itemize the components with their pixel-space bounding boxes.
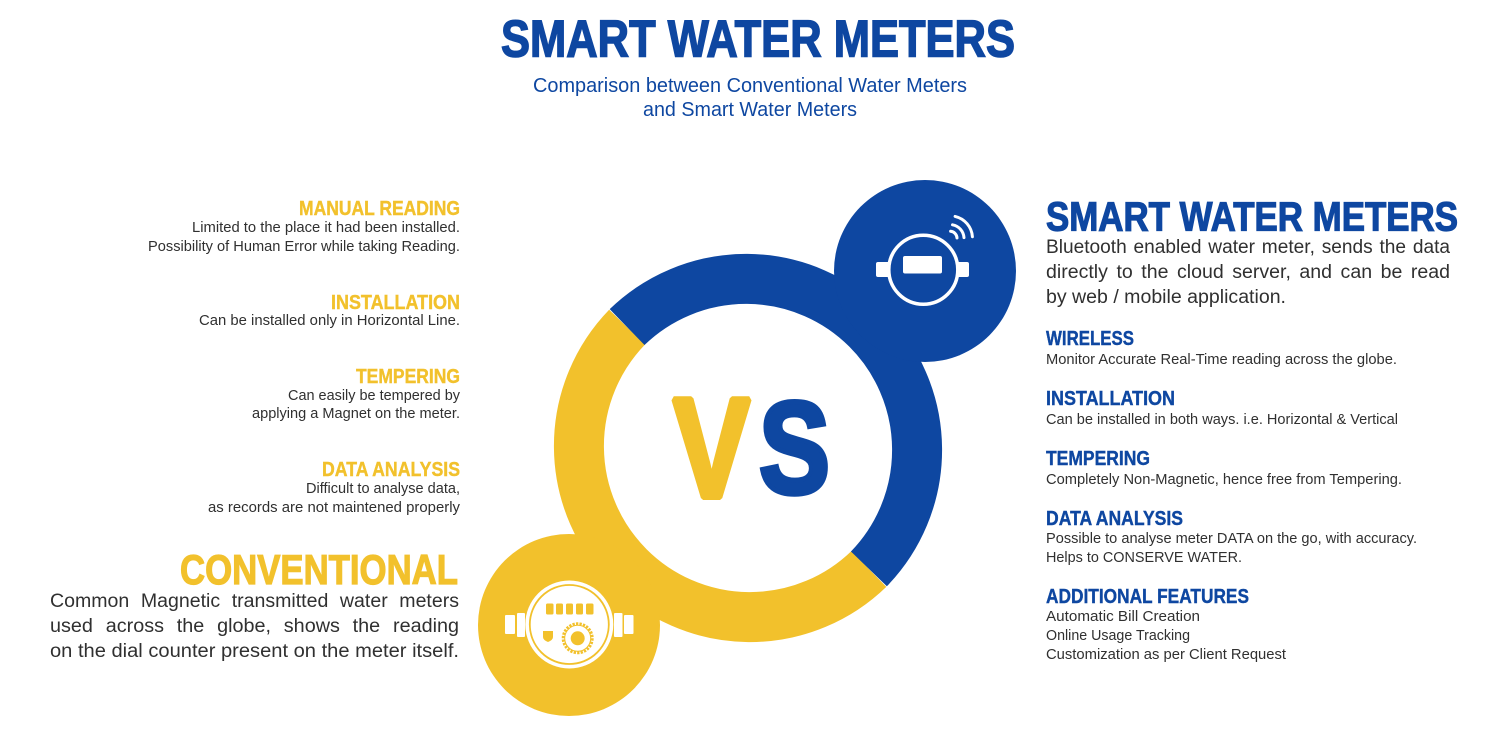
icon: smart water meter with signal [876,216,972,304]
tempering item: Completely Non-Magnetic, hence free from Tempering. [1046,472,1402,488]
data analysis item: Possible to analyse meter DATA on the go, with accuracy. [1046,531,1417,547]
additional features item [1046,585,1286,663]
tempering item [252,366,461,422]
data analysis item [1046,507,1417,566]
wireless item [1046,327,1397,368]
panel: conventional summary: Common Magnetic transmitted water meters [50,591,459,612]
manual reading item [148,198,460,255]
panel: smart meter summary [1046,194,1458,308]
yellow circle [478,534,660,716]
data analysis item: DATA ANALYSIS [322,459,460,481]
panel: conventional summary [50,546,459,662]
panel: conventional summary: CONVENTIONAL [180,546,458,593]
panel: smart meter features [1046,327,1417,663]
data analysis item: DATA ANALYSIS [1046,507,1183,530]
additional features item: Automatic Bill Creation [1046,609,1200,625]
panel: smart meter summary: by web / mobile application. [1046,287,1286,308]
VS letters: V [673,369,750,528]
installation item [1046,387,1398,428]
VS letters [673,369,830,528]
tempering item: applying a Magnet on the meter. [252,406,460,422]
tempering item [1046,447,1402,488]
manual reading item: MANUAL READING [299,198,460,220]
panel: conventional summary: on the dial counter present on the meter itself. [50,641,459,662]
subtitle: and Smart Water Meters [643,99,857,121]
yellow half ring [579,327,869,617]
installation item: INSTALLATION [1046,387,1175,410]
subtitle [533,75,967,121]
title: SMART WATER METERS [501,10,1015,68]
wireless item: Monitor Accurate Real-Time reading across the globe. [1046,352,1397,368]
panel: smart meter summary: directly to the cloud server, and can be read [1046,262,1450,283]
wireless item: WIRELESS [1046,327,1134,350]
tempering item: TEMPERING [356,366,460,388]
VS letters: S [759,374,830,521]
installation item: INSTALLATION [331,292,460,314]
panel: smart meter summary: Bluetooth enabled water meter, sends the data [1046,237,1450,258]
manual reading item: Possibility of Human Error while taking Reading. [148,239,460,255]
blue half ring [627,279,917,569]
additional features item: Customization as per Client Request [1046,647,1286,663]
data analysis item [208,459,461,516]
blue circle [834,180,1016,362]
subtitle: Comparison between Conventional Water Meters [533,75,967,97]
icon: conventional water meter [505,580,634,668]
additional features item: Online Usage Tracking [1046,628,1190,644]
data analysis item: Helps to CONSERVE WATER. [1046,550,1242,566]
VS ring graphic [478,180,1016,716]
tempering item: Can easily be tempered by [288,388,461,404]
installation item: Can be installed in both ways. i.e. Horizontal & Vertical [1046,412,1398,428]
panel: conventional features [148,198,461,516]
installation item: Can be installed only in Horizontal Line. [199,313,460,329]
manual reading item: Limited to the place it had been installed. [192,220,460,236]
panel: conventional summary: used across the globe, shows the reading [50,616,459,637]
tempering item: TEMPERING [1046,447,1150,470]
data analysis item: as records are not maintened properly [208,500,461,516]
additional features item: ADDITIONAL FEATURES [1046,585,1249,608]
data analysis item: Difficult to analyse data, [306,481,460,497]
installation item [199,292,460,329]
